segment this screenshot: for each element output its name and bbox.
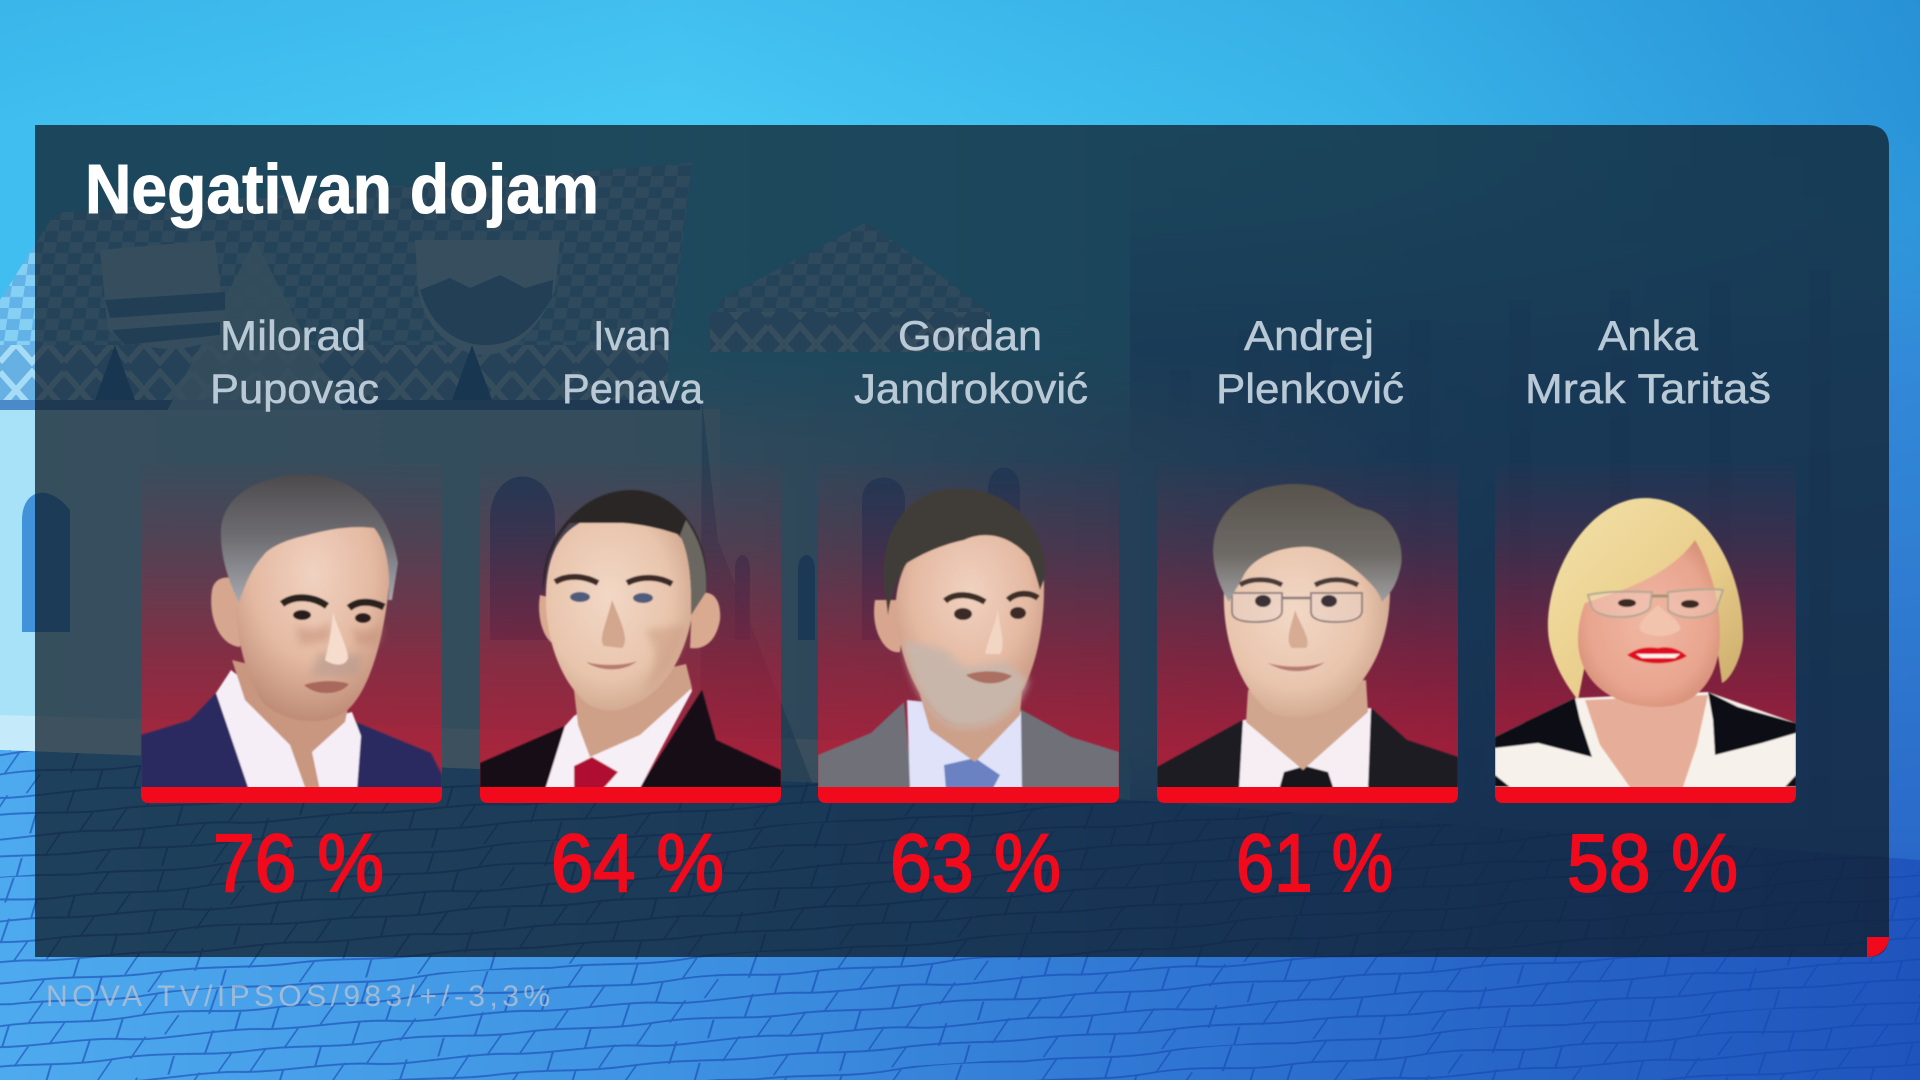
portrait	[1157, 484, 1458, 790]
photo panel	[1157, 463, 1458, 787]
source note: NOVA TV/IPSOS/983/+/-3,3%	[46, 980, 550, 1013]
name	[210, 312, 379, 412]
white plinth	[0, 715, 1000, 790]
name	[854, 312, 1088, 412]
value: 63 %	[890, 818, 1061, 909]
candidate card: Andrej Plenković	[1157, 312, 1458, 909]
value: 76 %	[213, 818, 384, 909]
photo panel	[818, 463, 1119, 787]
soft facade blend	[640, 400, 1400, 810]
photo panel	[480, 463, 781, 787]
name	[1525, 312, 1771, 412]
value: 64 %	[551, 818, 724, 909]
red bar	[141, 787, 442, 803]
candidate card: Milorad Pupovac	[141, 312, 442, 909]
church roof	[0, 163, 700, 415]
portrait	[818, 489, 1119, 790]
title: Negativan dojam	[85, 150, 599, 228]
dark panel	[35, 125, 1889, 957]
church facade	[0, 409, 720, 778]
photo panel	[1495, 463, 1796, 787]
value: 61 %	[1236, 818, 1393, 909]
portrait	[1495, 498, 1796, 790]
name: Plenković	[1216, 365, 1404, 412]
red bar	[1495, 787, 1796, 803]
side roof	[710, 222, 990, 352]
name: Pupovac	[210, 365, 379, 412]
name	[562, 312, 704, 412]
value: 58 %	[1567, 818, 1738, 909]
portrait	[141, 475, 442, 790]
panel corner accent	[1867, 937, 1889, 957]
name: Jandroković	[854, 365, 1088, 412]
red bar	[818, 787, 1119, 803]
name	[1216, 312, 1404, 412]
name: Milorad	[220, 312, 366, 359]
name: Gordan	[898, 312, 1042, 359]
name: Ivan	[593, 312, 671, 359]
name: Penava	[562, 365, 704, 412]
gothic windows	[22, 468, 1020, 640]
candidate card: Anka Mrak Taritaš	[1495, 312, 1796, 909]
name: Mrak Taritaš	[1525, 365, 1771, 412]
photo panel	[141, 463, 442, 787]
name: Andrej	[1244, 312, 1374, 359]
red bar	[1157, 787, 1458, 803]
candidate card: Gordan Jandroković	[818, 312, 1119, 909]
gothic spire	[700, 400, 815, 790]
candidate card: Ivan Penava	[480, 312, 781, 909]
name: Anka	[1598, 312, 1699, 359]
red bar	[480, 787, 781, 803]
portrait	[480, 490, 781, 790]
right building	[1130, 130, 1920, 860]
cobblestone ground	[0, 750, 1920, 1080]
